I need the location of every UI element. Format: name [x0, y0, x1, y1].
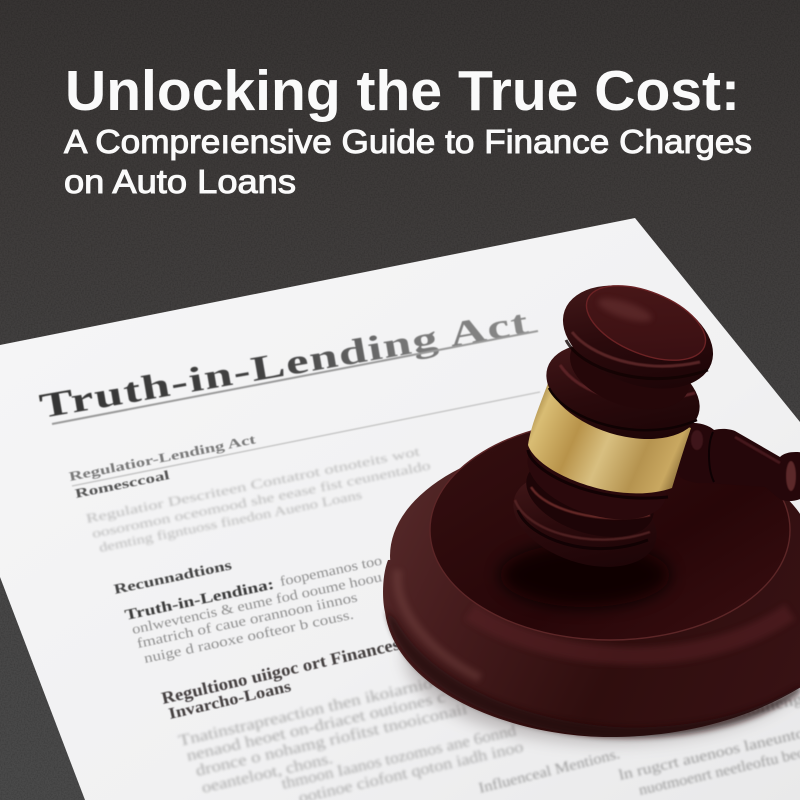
- lower gavel head: [501, 419, 677, 584]
- sound block: [383, 420, 800, 738]
- bottom right paragraph: enunoilieng: [713, 691, 800, 726]
- subheading and rule: [68, 392, 540, 501]
- subheading and rule: Regulatior-Lending Act: [68, 431, 258, 484]
- title line 3: on Auto Loans: [64, 163, 296, 200]
- section: Recunnadtions: onlwevtencis & eume fod ooume hoou: [131, 570, 383, 638]
- title line 1: Unlocking the True Cost:: [65, 59, 740, 123]
- lower paragraph: dronce o nohamg riofitst tnooiconaii: [194, 701, 469, 780]
- section: Regultiono: Regultiono uiigoc ort Finances: [160, 634, 402, 708]
- lower paragraph: [177, 675, 525, 800]
- title: [64, 59, 752, 200]
- neck: [560, 317, 700, 423]
- gavel handle: [676, 423, 800, 501]
- bottom right paragraph: nuotmoenrt neetleoftu beo: [637, 745, 800, 799]
- gavel contact shadow: [500, 543, 670, 607]
- bottom right paragraph: Influenceal Mentions.: [477, 746, 622, 797]
- lower paragraph: nenaod heoet on-driacet outiones c: [185, 689, 447, 765]
- brass band: [528, 383, 691, 493]
- document sheet: [0, 218, 800, 800]
- gavel and sound block: [383, 266, 800, 743]
- bottom right paragraph: [477, 691, 800, 799]
- bottom right paragraph: ln rugcrt auenoos laneunto: [617, 726, 800, 784]
- section: Recunnadtions: Recunnadtions: [113, 558, 234, 598]
- title line 2: A Compreıensive Guide to Finance Charges: [64, 123, 752, 160]
- lower paragraph: Tnatinstrapreaction then ikoiarnio: [177, 675, 434, 750]
- intro paragraph: oosoromon oceomood she eease fist ceunentaldo: [91, 457, 432, 541]
- upper gavel head: [535, 266, 727, 456]
- intro paragraph: Regulatior Descriteen Contatrot otnoteits wot: [85, 443, 421, 526]
- section: Recunnadtions: Truth-in-Lendina:: [124, 577, 276, 624]
- section: Regultiono: Invarcho-Loans: [167, 678, 293, 723]
- lower paragraph: oeanteloot, chons.: [200, 750, 334, 797]
- section: Recunnadtions: fmatrich of caue orannoon iinnos: [136, 590, 359, 652]
- intro paragraph: demting figntuoss finedon Aueno Loans: [98, 487, 363, 555]
- section: Recunnadtions: [113, 554, 384, 667]
- top disc: [549, 266, 727, 408]
- subheading and rule: Romesccoal: [74, 467, 171, 501]
- second collar: [535, 326, 711, 456]
- intro paragraph: [85, 443, 432, 555]
- document heading: Truth-in-Lending Act: Truth-in-Lending Act: [37, 302, 532, 426]
- lower paragraph: thmoon Iaanos tozomos ane 6onnd: [280, 722, 518, 793]
- section: Recunnadtions: foopemanos too: [279, 554, 384, 590]
- section: Recunnadtions: nuige d raooxe oofteor b couss.: [143, 608, 355, 667]
- block shadow: [405, 567, 800, 743]
- document heading: Truth-in-Lending Act: [37, 302, 538, 426]
